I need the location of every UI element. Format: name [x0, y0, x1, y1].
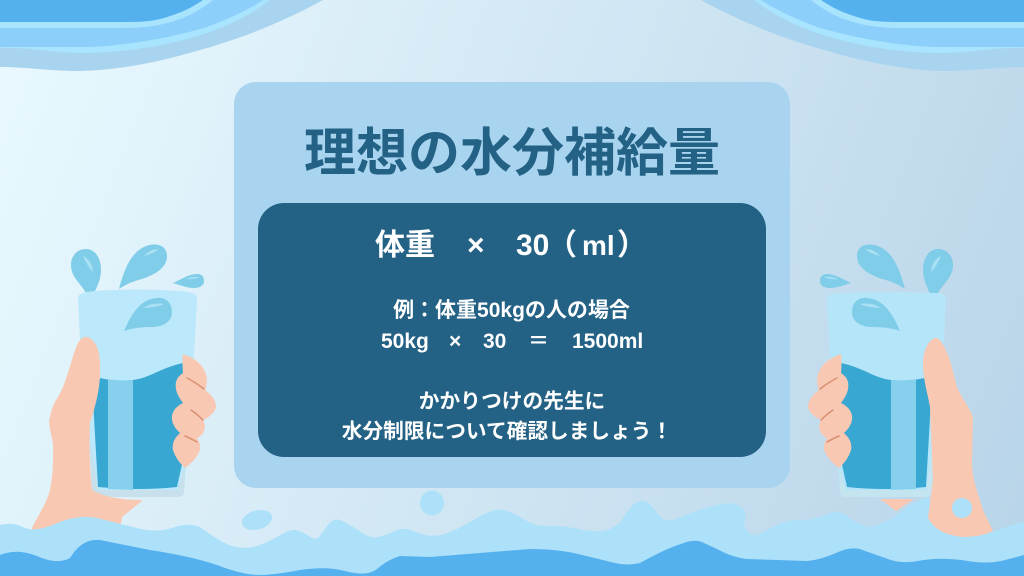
top-right wave bands — [701, 0, 1024, 71]
bottom light wave — [0, 497, 1024, 576]
creases right — [820, 378, 839, 442]
wrist dot — [952, 498, 972, 518]
example calculation: × — [449, 330, 461, 353]
formula line: 30 — [516, 229, 549, 262]
icon: water drops — [71, 244, 204, 302]
example calculation: ＝ — [528, 330, 549, 353]
illustration: left hand holding glass — [32, 244, 216, 534]
example calculation: 30 — [483, 330, 506, 353]
drop in glass right — [852, 298, 900, 331]
water right — [841, 363, 931, 489]
finger creases — [185, 378, 204, 442]
panel: formula details — [258, 203, 766, 457]
example calculation: 50kg — [381, 330, 429, 353]
illustration: right hand holding glass — [808, 244, 953, 511]
title: 理想の水分補給量 — [304, 125, 720, 183]
formula line: ） — [617, 229, 647, 262]
fingers right — [808, 354, 852, 468]
formula line: ml — [582, 230, 615, 261]
advice text: 水分制限について確認しましょう！ — [342, 420, 672, 443]
fingers — [172, 354, 216, 468]
forearm right — [923, 338, 993, 537]
formula line: × — [467, 229, 485, 262]
example calculation: 1500ml — [572, 330, 643, 353]
hand — [32, 337, 143, 534]
bottom droplet blob 1 — [420, 490, 444, 516]
icon: water drops right — [820, 244, 953, 302]
formula line: 体重 — [375, 229, 435, 262]
palm behind wave — [880, 499, 914, 511]
stripe right — [891, 380, 916, 490]
icon: drop in glass — [124, 298, 172, 331]
formula line: （ — [547, 229, 577, 262]
bottom dark wave — [0, 540, 1024, 576]
water in glass — [93, 363, 183, 489]
advice text: かかりつけの先生に — [419, 390, 605, 413]
bottom droplet blob 2 — [240, 507, 274, 533]
glass right — [827, 292, 946, 497]
example heading: 例：体重50kgの人の場合 — [393, 299, 630, 322]
glass — [78, 290, 197, 497]
top-left wave bands — [0, 0, 323, 71]
glass highlight stripe — [108, 380, 133, 490]
